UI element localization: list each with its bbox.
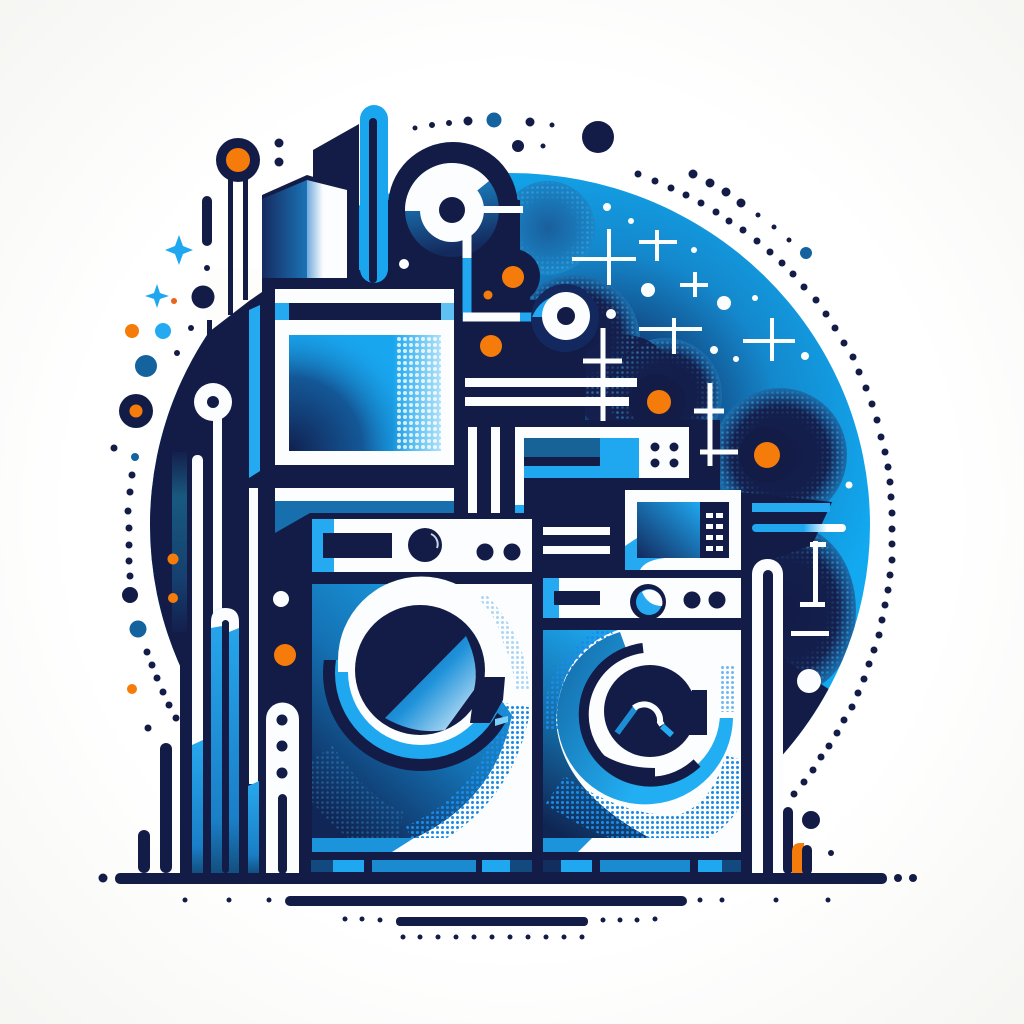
left washer [311,519,532,872]
dotted arcs [114,121,892,794]
horizontal bars [465,378,637,513]
bottom right details [783,807,834,875]
globe backdrop [150,173,870,873]
orange nodes [480,249,795,483]
washer door [323,575,519,771]
left pillars [138,383,299,874]
short bars beside washer [543,527,610,554]
washer door [557,632,733,804]
gear ring top [388,142,540,317]
small appliance [515,427,689,513]
top-left antenna [202,138,260,342]
stars and plus signs [572,203,852,488]
tower blocks [262,105,520,290]
small node ring [531,284,599,352]
right side bars and marks [752,503,846,880]
top dots [274,112,812,259]
right washer [543,578,742,872]
left decorations [119,235,214,694]
microwave [625,490,741,570]
oven panel [249,289,454,533]
ground lines [98,873,917,940]
